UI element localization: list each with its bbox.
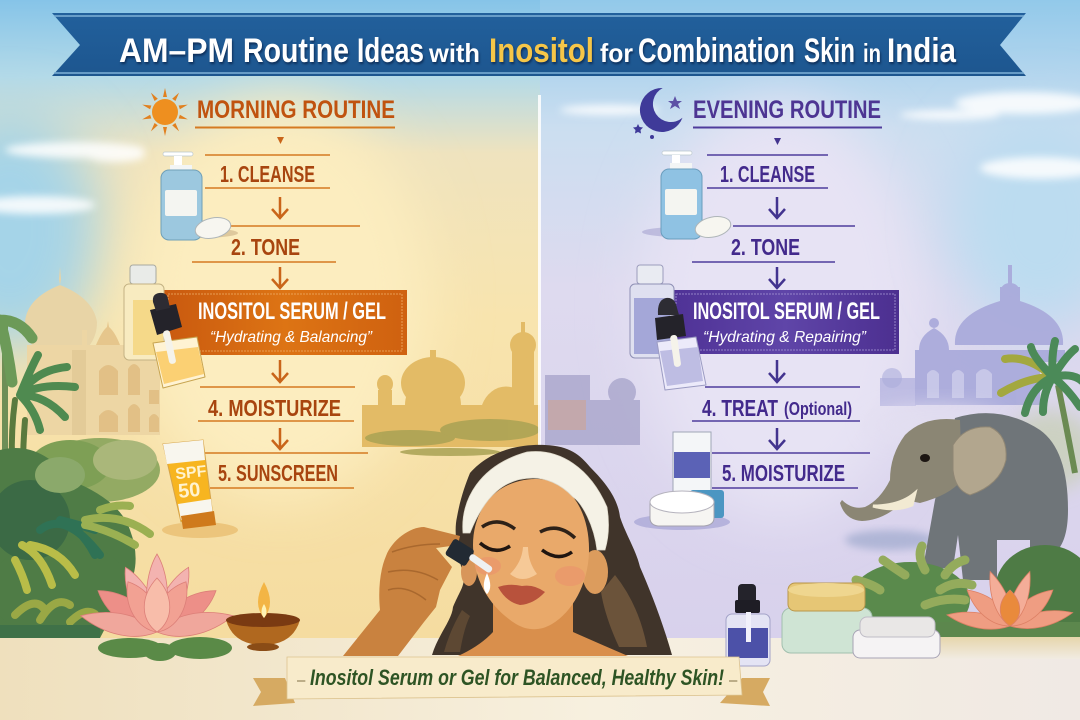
neck and shoulders bbox=[458, 600, 628, 656]
title text: India bbox=[887, 32, 957, 70]
bushes bbox=[40, 438, 160, 502]
title text: Routine bbox=[243, 32, 349, 70]
morning heading: MORNING ROUTINE bbox=[197, 96, 395, 124]
icon: blue cleanser pump bottle bbox=[161, 152, 238, 242]
icon: sun bbox=[142, 88, 188, 136]
icon: SPF 50 sunscreen tube: SPF bbox=[174, 463, 207, 483]
soft glow behind evening routine bbox=[640, 100, 920, 520]
step 1 cleanse: 1. CLEANSE bbox=[220, 161, 315, 187]
step 2 tone: 2. TONE bbox=[231, 234, 300, 260]
panel: evening routine bbox=[630, 88, 899, 530]
icon: pink lotus left bbox=[79, 554, 235, 661]
right ear bbox=[582, 550, 608, 594]
title text: Skin bbox=[804, 32, 855, 70]
left fort in evening haze bbox=[545, 375, 640, 445]
step 3 inositol box bbox=[163, 290, 407, 355]
evening heading: EVENING ROUTINE bbox=[693, 96, 881, 124]
front palm bbox=[12, 355, 75, 468]
step 2 tone: 2. TONE bbox=[731, 234, 800, 260]
blue sky wash on far right bbox=[950, 110, 1080, 330]
soft glow behind morning routine bbox=[130, 100, 430, 500]
cheek blush bbox=[475, 557, 585, 586]
icon: elephant bbox=[840, 413, 1068, 580]
clouds bbox=[0, 92, 1080, 214]
illustration: woman applying serum bbox=[343, 445, 672, 656]
icon: SPF 50 sunscreen tube: 50 bbox=[177, 479, 201, 503]
box title: INOSITOL SERUM / GEL bbox=[693, 298, 880, 325]
haze under right monument bbox=[865, 405, 1005, 445]
right-of-morning monument: golden palace bbox=[362, 322, 540, 456]
bottom ribbon banner: Inositol Serum or Gel for Balanced, Healthy Skin! bbox=[310, 665, 724, 690]
icon: purple dropper bottle bbox=[726, 584, 770, 666]
panel: morning routine bbox=[124, 88, 407, 538]
step 4 treat optional bbox=[702, 395, 852, 421]
icon: crescent moon and stars bbox=[633, 88, 682, 139]
bottom sand band bbox=[0, 638, 1080, 720]
box subtitle: “Hydrating & Balancing” bbox=[210, 329, 373, 346]
left foliage bbox=[0, 320, 160, 640]
dropper bbox=[445, 538, 493, 593]
box title: INOSITOL SERUM / GEL bbox=[198, 298, 386, 325]
icon: SPF 50 sunscreen tube bbox=[162, 440, 238, 538]
lips bbox=[498, 585, 545, 605]
heading pointer bbox=[277, 137, 284, 144]
right foliage bbox=[850, 545, 1080, 639]
arm and hand bbox=[343, 527, 460, 656]
eyebrows bbox=[482, 522, 515, 529]
right eyebrow bbox=[540, 528, 575, 538]
step 5 sunscreen: 5. SUNSCREEN bbox=[218, 460, 338, 486]
nose bbox=[510, 547, 537, 579]
icon: toner bottle and dropper serum bbox=[630, 265, 706, 390]
title text: in bbox=[863, 38, 881, 68]
divider between routines bbox=[538, 95, 541, 445]
right palm tree and sage foliage bbox=[1001, 341, 1080, 490]
icon: blue cleanser pump bottle bbox=[642, 151, 733, 241]
rules and arrows bbox=[692, 128, 882, 488]
box subtitle: “Hydrating & Repairing” bbox=[703, 329, 867, 346]
icon: toner bottle and dropper serum bbox=[124, 265, 205, 388]
step 4 treat optional: (Optional) bbox=[784, 399, 852, 419]
face bbox=[473, 479, 589, 629]
title text: Ideas bbox=[357, 32, 424, 70]
right shelf strip bbox=[940, 637, 1080, 659]
mist patch beneath the elephant bbox=[845, 530, 935, 550]
step 5 moisturize: 5. MOISTURIZE bbox=[722, 460, 845, 486]
background: cool evening sky bbox=[540, 0, 1080, 640]
background: warm morning sky bbox=[0, 0, 540, 640]
right monument: domed palace in mauve bbox=[880, 265, 1065, 406]
icon: diya oil lamp bbox=[226, 582, 300, 651]
title text: with bbox=[428, 38, 480, 68]
icon: moisturizer tube and jar bbox=[634, 432, 730, 530]
step 4 moisturize: 4. MOISTURIZE bbox=[208, 395, 341, 421]
bottom ribbon banner: – bbox=[729, 672, 738, 689]
closed eyelids bbox=[480, 543, 572, 557]
step 1 cleanse: 1. CLEANSE bbox=[720, 161, 815, 187]
banner text: – bbox=[297, 672, 306, 689]
tall palm bbox=[0, 320, 32, 470]
title text: for bbox=[600, 38, 633, 68]
left ear bbox=[461, 558, 477, 586]
blue sky wash on far left bbox=[0, 110, 100, 350]
title text bbox=[119, 32, 957, 70]
headband bbox=[463, 451, 608, 550]
hair bbox=[432, 445, 672, 655]
rules and arrows bbox=[192, 128, 395, 488]
title banner bbox=[52, 13, 1026, 76]
icon: pink lotus right bbox=[946, 569, 1074, 633]
title text: Inositol bbox=[489, 32, 594, 70]
left monument: Taj Mahal silhouette bbox=[25, 267, 160, 435]
step 3 inositol box bbox=[672, 290, 899, 354]
heading pointer bbox=[774, 138, 781, 145]
bottom ribbon banner bbox=[253, 657, 770, 706]
step 4 treat optional: 4. TREAT bbox=[702, 395, 778, 421]
title text: AM–PM bbox=[119, 32, 234, 70]
finger creases bbox=[388, 544, 440, 600]
title text: Combination bbox=[638, 32, 795, 70]
icon: cream jars bbox=[782, 583, 940, 658]
